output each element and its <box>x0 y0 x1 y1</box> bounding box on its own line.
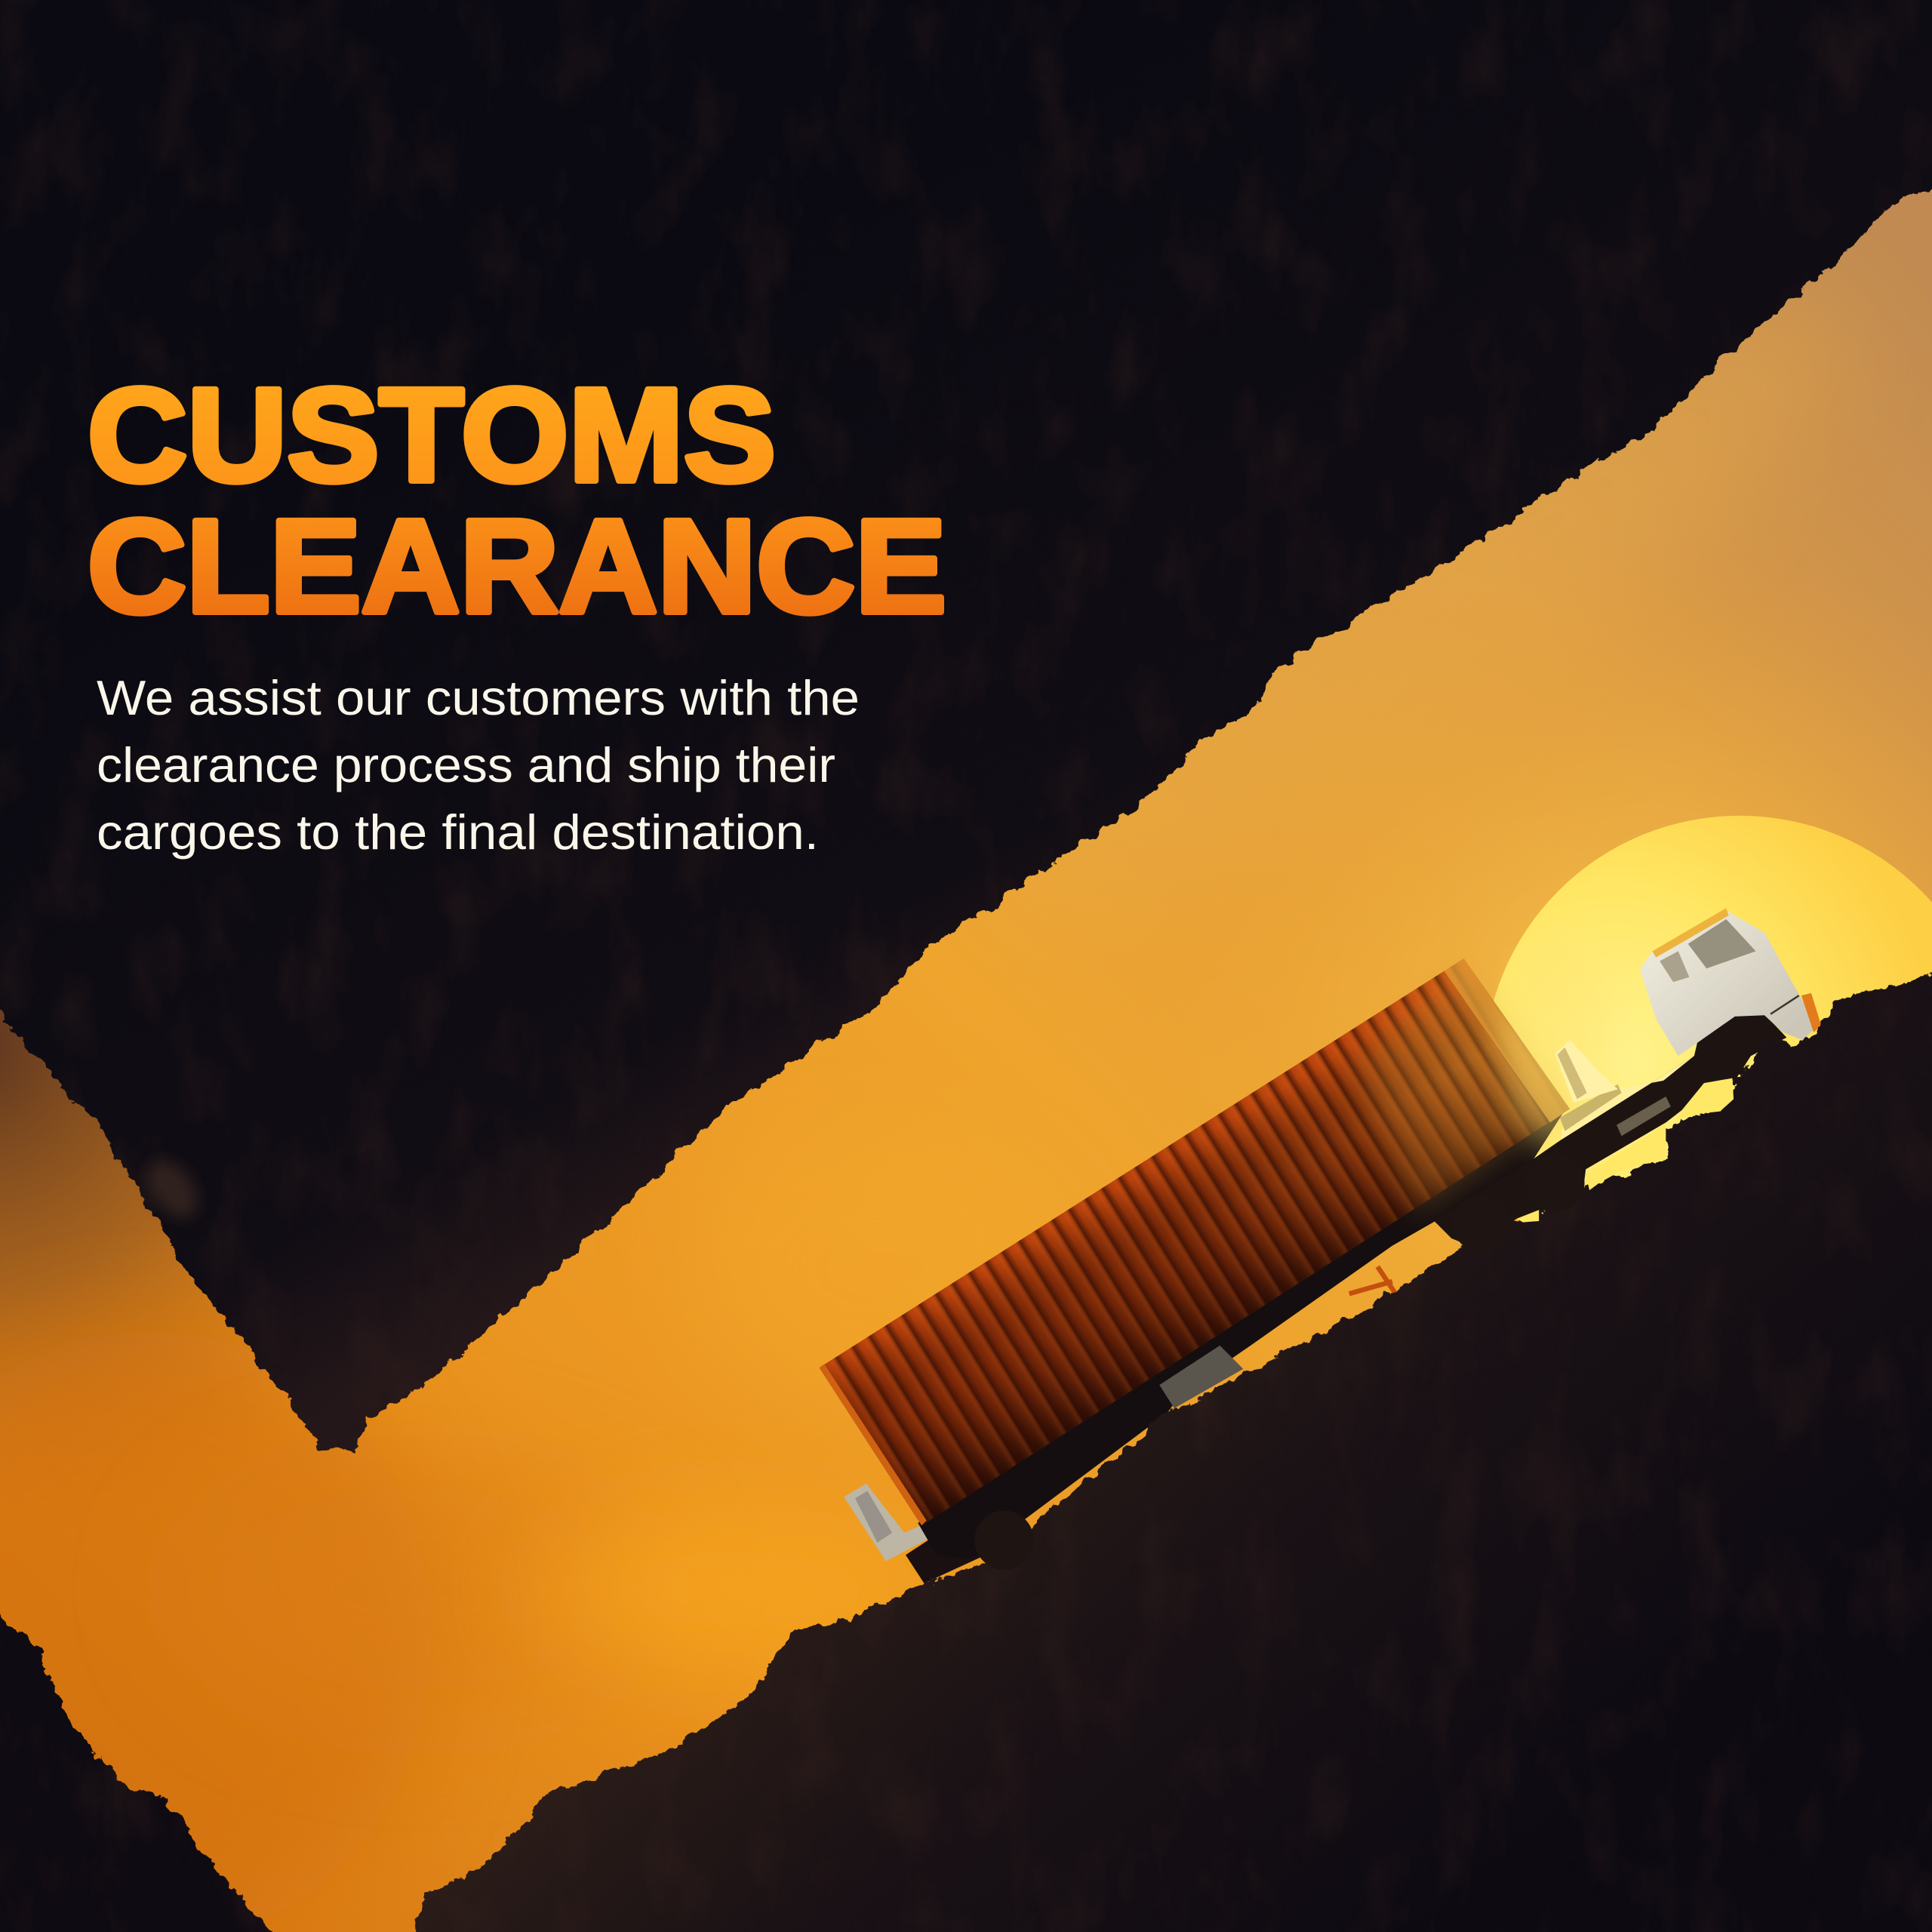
truck cab <box>1640 908 1821 1056</box>
title line 1: CUSTOMS <box>88 361 776 509</box>
sunlit gaps under truck <box>1517 1078 1734 1223</box>
shipping container <box>820 958 1570 1525</box>
body line 2: clearance process and ship their <box>97 737 835 792</box>
upper rock mass <box>0 0 1932 1451</box>
lower hillside <box>394 968 1932 1932</box>
trailer chassis <box>918 1106 1567 1558</box>
truck tractor frame <box>1434 1014 1786 1247</box>
rock highlight <box>138 1152 207 1226</box>
body line 3: cargoes to the final destination. <box>97 804 819 860</box>
truck wheels <box>974 1153 1585 1570</box>
rear light unit <box>844 1484 986 1583</box>
sun <box>1484 816 1932 1328</box>
glow over container end <box>1506 943 1619 1152</box>
title <box>88 361 946 641</box>
body line 1: We assist our customers with the <box>97 670 860 725</box>
exhaust stack <box>1555 1040 1618 1103</box>
lower left hillside <box>0 1589 296 1932</box>
body text <box>97 670 860 860</box>
truck and container <box>820 908 1821 1583</box>
title line 2: CLEARANCE <box>88 493 946 641</box>
landing leg <box>1349 1266 1397 1297</box>
